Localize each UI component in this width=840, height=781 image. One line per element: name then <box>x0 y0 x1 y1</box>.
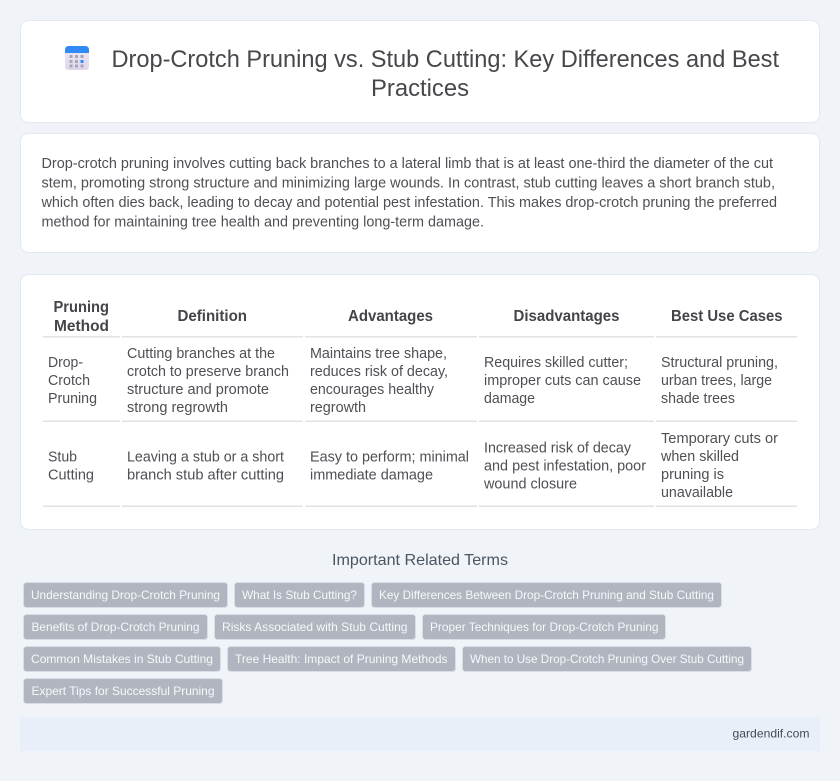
tag list: related terms: Proper Techniques for Drop-Crotch Pruning <box>430 620 658 634</box>
table row: stub cutting: and pest infestation, poor <box>484 458 646 474</box>
table row: drop-crotch pruning: Cutting branches at the <box>127 346 275 362</box>
text block: summary: method for maintaining tree health and preventing long-term damage. <box>42 214 484 230</box>
text block: summary: stem, promoting strong structure and minimizing large wounds. In contrast, stub cutting leaves a short branch stub, <box>42 176 775 192</box>
tag list: related terms: When to Use Drop-Crotch Pruning Over Stub Cutting <box>470 652 744 666</box>
table row: stub cutting <box>48 431 778 501</box>
table row: drop-crotch pruning: shade trees <box>661 391 735 407</box>
tag list: related terms: What Is Stub Cutting? <box>242 588 357 602</box>
table row: drop-crotch pruning: reduces risk of decay, <box>310 364 448 380</box>
tag list: related terms: Benefits of Drop-Crotch Pruning <box>32 620 200 634</box>
panel: comparison table <box>20 274 820 530</box>
table row: stub cutting: Increased risk of decay <box>484 440 632 456</box>
title: Practices <box>371 75 469 102</box>
tag list: related terms: Common Mistakes in Stub Cutting <box>31 652 213 666</box>
text block: summary <box>40 156 777 230</box>
text block: summary: Drop-crotch pruning involves cutting back branches to a lateral limb that is at least one-third the diameter of the cut <box>42 156 773 172</box>
text block: summary: which often dies back, leading to decay and potential pest infestation. This makes drop-crotch pruning the preferred <box>40 195 777 211</box>
table row: drop-crotch pruning: encourages healthy <box>310 382 435 398</box>
table row: drop-crotch pruning: structure and promote <box>127 382 269 398</box>
table row: stub cutting: wound closure <box>483 476 577 492</box>
table row: stub cutting: Stub <box>48 450 77 466</box>
table row: drop-crotch pruning: regrowth <box>310 400 366 416</box>
table row: stub cutting: Cutting <box>48 468 94 484</box>
table row: stub cutting: Easy to perform; minimal <box>310 450 469 466</box>
table header row: Disadvantages <box>514 308 620 325</box>
tag list: related terms: Understanding Drop-Crotch Pruning <box>31 588 220 602</box>
table row: drop-crotch pruning: damage <box>484 391 535 407</box>
table row: stub cutting: pruning is <box>661 467 724 483</box>
table row: stub cutting: when skilled <box>660 449 739 465</box>
table row: drop-crotch pruning: Pruning <box>48 391 97 407</box>
footer bar <box>20 717 820 751</box>
table header row <box>54 299 783 335</box>
table row: drop-crotch pruning: strong regrowth <box>127 400 228 416</box>
footer bar: gardendif.com <box>732 726 810 740</box>
table row: drop-crotch pruning <box>48 346 778 416</box>
tag list: related terms: Key Differences Between Drop-Crotch Pruning and Stub Cutting <box>379 588 714 602</box>
table row: stub cutting: Leaving a stub or a short <box>127 450 284 466</box>
table header row: Definition <box>178 308 247 325</box>
table row: stub cutting: unavailable <box>661 485 733 501</box>
table row: stub cutting: branch stub after cutting <box>127 468 284 484</box>
table row: drop-crotch pruning: urban trees, large <box>661 373 772 389</box>
table row: drop-crotch pruning: Requires skilled cutter; <box>484 355 628 371</box>
tag list: related terms <box>24 582 752 704</box>
icon: calendar <box>65 46 89 70</box>
panel: summary text <box>20 134 820 252</box>
table row: stub cutting: immediate damage <box>310 468 433 484</box>
table row: drop-crotch pruning: Crotch <box>48 373 90 389</box>
tag list: related terms: Expert Tips for Successful Pruning <box>32 684 214 698</box>
tag list: related terms: Tree Health: Impact of Pruning Methods <box>235 652 448 666</box>
table header row: Method <box>54 318 109 335</box>
table row: drop-crotch pruning: Drop- <box>48 355 83 371</box>
table header row: Best Use Cases <box>671 308 783 325</box>
title <box>112 46 779 102</box>
table row: drop-crotch pruning: improper cuts can cause <box>484 373 641 389</box>
table header row: Advantages <box>348 308 433 325</box>
table row: drop-crotch pruning: Maintains tree shape, <box>310 346 447 362</box>
table row: drop-crotch pruning: crotch to preserve branch <box>127 364 289 380</box>
table header row: Pruning <box>54 299 109 316</box>
tag list: related terms: Risks Associated with Stub Cutting <box>222 620 408 634</box>
panel: header <box>20 20 820 122</box>
heading: important related terms: Important Related Terms <box>332 552 508 569</box>
table row: drop-crotch pruning: Structural pruning, <box>661 355 778 371</box>
table row: stub cutting: Temporary cuts or <box>661 431 778 447</box>
title: Drop-Crotch Pruning vs. Stub Cutting: Key Differences and Best <box>112 46 779 73</box>
